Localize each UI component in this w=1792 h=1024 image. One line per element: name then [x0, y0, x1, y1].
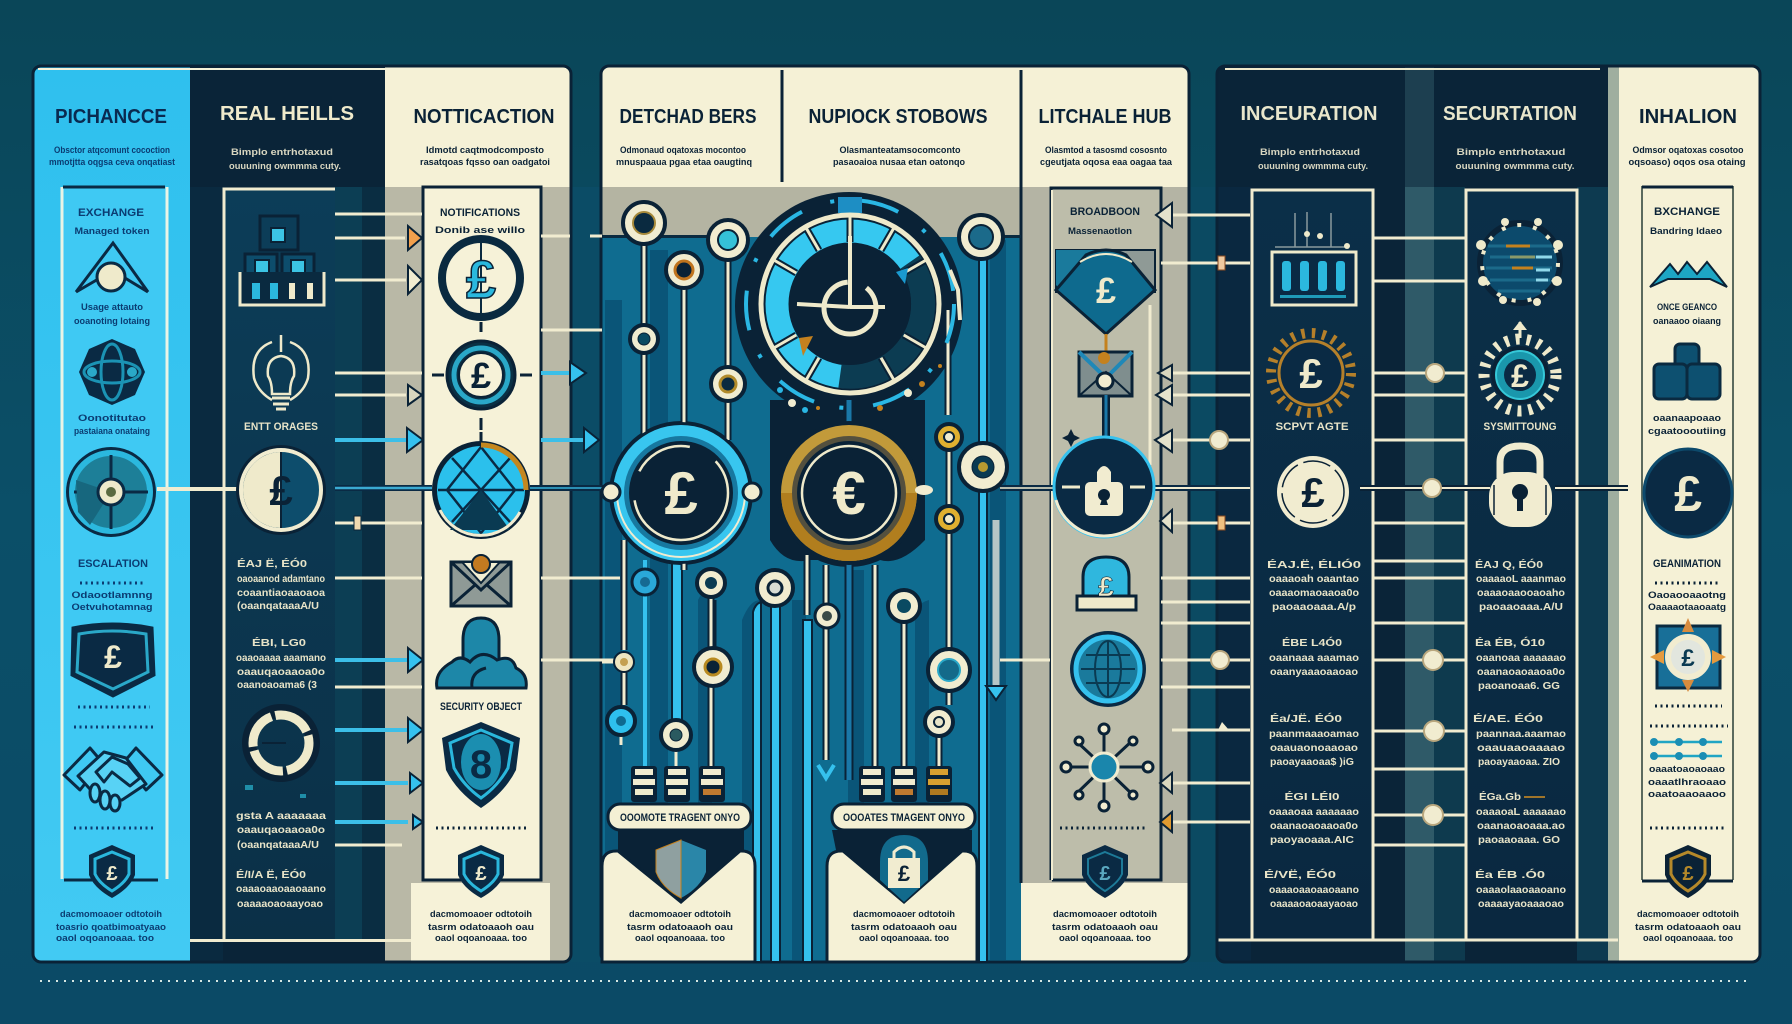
icon: shield pound [72, 624, 154, 696]
icon: pound coin col 3 [442, 239, 520, 317]
gap teal between panel A and B [571, 187, 602, 962]
col 9 labels: oaaatoaoaoaao [1649, 764, 1725, 775]
header sub-text: Odmsor oqatoxas cosotoo [1632, 145, 1744, 156]
header sub-text: ouuuning owmmma cuty. [229, 161, 341, 172]
label: security gate: SCPVT AGTE [1276, 421, 1348, 433]
card: right footer: £ [898, 861, 911, 886]
icon: envelope [451, 555, 511, 606]
text block: col 8 rows: oaaaoaL aaaaaao [1476, 806, 1566, 818]
text block: col 6 footer [1052, 909, 1158, 944]
icon: pound ring coin col 3 [432, 322, 532, 445]
text block: col 1 footer: oaol oqoanoaaa. too [56, 933, 154, 944]
column headings: INCEURATION [1240, 103, 1378, 125]
col 9 labels: GEANIMATION [1653, 558, 1721, 570]
header sub-text: ouuuning owmmma cuty. [1258, 161, 1368, 172]
header sub-text: Bimplo entrhotaxud [1260, 147, 1360, 158]
vertical connector lines [602, 237, 1060, 780]
col 6 labels: Massenaotlon [1068, 226, 1132, 237]
col 9 labels: Oaoaooaaotng [1648, 590, 1726, 601]
text: notifications label: Donib ase willo [435, 225, 525, 236]
pill: left label [608, 804, 751, 830]
icon: shield pound: £ [104, 639, 122, 675]
icon: sun gear pound [1271, 333, 1351, 413]
icon: bars panel [1272, 212, 1356, 305]
icon: lock small: £ [1098, 571, 1114, 602]
icon: pin shield pound: £ [1096, 270, 1116, 311]
header sub-text: oqsoaso) oqos osa otaing [1628, 157, 1746, 168]
text block: col 7 rows: ÉGI LÉI0 [1284, 790, 1340, 803]
text block: col 1 footer [56, 909, 166, 944]
icon: lightbulb [253, 335, 309, 409]
column headings: PICHANCCE [55, 106, 167, 128]
icon: small shield col 1: £ [106, 863, 118, 885]
icon: gear with arrow: £ [1511, 358, 1529, 394]
gap teal between panel B and C [1189, 187, 1218, 962]
icon: pound coin col 3: £ [466, 250, 496, 310]
col 9 labels: Oaaaaotaaoaatg [1648, 602, 1726, 613]
icon: sun gear pound: £ [1299, 350, 1323, 397]
text block: col 3 footer [428, 909, 534, 944]
icon: small shield col 6 [1082, 845, 1128, 898]
column headings: NOTTICACTION [414, 106, 554, 128]
node: nodes upper left [623, 202, 748, 401]
card: right footer: dacmomoaoer odtotoih [853, 909, 955, 920]
panel: left group [34, 67, 571, 962]
header sub-text: ouuuning owmmma cuty. [1456, 161, 1574, 172]
label: security object: SECURITY OBJECT [440, 701, 522, 713]
header sub-text: rasatqoas fqsso oan oadgatoi [420, 157, 550, 168]
text block: col 8 rows: ÉGa.Gb [1479, 790, 1521, 803]
header sub-text: cgeutjata oqosa eaa oagaa taa [1040, 157, 1173, 168]
connectors: col 6 to col 7 [1150, 203, 1250, 832]
icon: lock small [1077, 557, 1136, 610]
text block: col 8 rows: paoanoaa6. GG [1478, 680, 1560, 692]
icon: pound ring coin col 3: £ [471, 355, 491, 396]
card: right footer [827, 835, 977, 962]
text block: col 6 footer: oaol oqoanoaaa. too [1059, 933, 1151, 944]
text block: col 9 footer: oaol oqoanoaaa. too [1643, 933, 1733, 944]
text block: col 8 rows: oaaaolaaoaaoano [1476, 884, 1566, 896]
text block: col 8 rows: oaanaoaoaaa.ao [1477, 820, 1565, 832]
col 1 labels: ESCALATION [78, 558, 148, 570]
text block: col 8 rows: oaauaaoaaaao [1477, 742, 1565, 754]
card: right footer: oaol oqoanoaaa. too [859, 933, 949, 944]
icon: timeline dots [1650, 738, 1722, 760]
column headings: SECURTATION [1443, 103, 1577, 125]
text block: col 8 rows: paoaaoaaa.A/U [1479, 601, 1563, 613]
card: left footer: tasrm odatoaaoh oau [627, 922, 733, 933]
text block: col 7 rows: oaaaoaaoaaoaano [1269, 884, 1359, 896]
text block: col 7 rows: oaanaoaoaaoa0o [1270, 820, 1358, 832]
text block: col 2 rows: coaantiaoaaoaoa [237, 587, 325, 599]
column headings: REAL HEILLS [220, 103, 354, 125]
header sub-text: pasaoaioa nusaa etan oatonqo [833, 157, 965, 168]
decorative center stripes [605, 240, 1006, 962]
pill: right label: OOOATES TMAGENT ONYO [843, 812, 965, 824]
text block: col 7 rows: oaanyaaaoaaoao [1270, 666, 1358, 678]
text block: col 8 rows: oaaaayaoaaaoao [1478, 898, 1564, 910]
bottom dotted rule [40, 980, 1750, 982]
icon: half coin col 2 [236, 445, 326, 535]
header sub-text: Idmotd caqtmodcomposto [426, 145, 544, 156]
header sub-text: Olasmtod a tasosmd cososnto [1045, 145, 1167, 156]
text block: col 7 rows: oaaaomaoaaoa0o [1269, 587, 1359, 599]
icon: gear with arrow [1484, 321, 1556, 411]
col 9 labels: oaatoaaoaaoo [1648, 789, 1726, 800]
coin: gold [777, 421, 933, 565]
clock dial [746, 197, 960, 413]
text block: col 8 rows: paannaa.aaamao [1476, 728, 1566, 740]
icon: cream coin: £ [1301, 469, 1325, 516]
pill: left label: OOOMOTE TRAGENT ONYO [620, 812, 740, 824]
text block: col 8 rows: ÉAJ Q, ÉÓ0 [1475, 558, 1543, 571]
icon: ornament badge: £ [1681, 645, 1695, 672]
text block: col 1 footer: toasrio qoatbimoatyaao [56, 922, 166, 933]
col 1 labels: Odaootlamnng [72, 590, 153, 601]
icon: small shield col 3: £ [475, 863, 487, 885]
icon: small shield col 6: £ [1099, 863, 1111, 885]
text block: col 3 footer: dacmomoaoer odtotoih [430, 909, 532, 920]
icon: globe [1070, 631, 1146, 707]
header sub-text: Bimplo entrhotaxud [231, 147, 333, 158]
text block: col 8 rows: oaaaoaaooaoaho [1477, 587, 1565, 599]
text block: col 8 rows [1473, 558, 1566, 910]
icon: small shield col 3 [458, 845, 504, 898]
text block: col 7 rows: oaanaaa aaamao [1269, 652, 1359, 664]
text block: col 8 rows: paoaaoaaa. GO [1478, 834, 1560, 846]
text block: col 9 footer: dacmomoaoer odtotoih [1637, 909, 1739, 920]
connectors: col 7 to col 8 [1360, 238, 1628, 845]
label: entrances: ENTT ORAGES [244, 421, 318, 433]
node: nodes lower [607, 569, 970, 750]
icon: half coin col 2: £ [269, 467, 293, 514]
col 9 labels [1648, 206, 1728, 828]
text block: col 8 rows: É/AE. ÉÓ0 [1473, 712, 1543, 725]
col 1 labels: Oonotitutao [78, 413, 146, 424]
text block: col 7 rows: ÉAJ.Ë, ÉLIÓ0 [1267, 558, 1361, 571]
col 9 labels: cgaatoooutiing [1648, 426, 1726, 437]
text block: col 2 rows: É/I/A Ë, ÉÓ0 [236, 868, 306, 881]
text block: col 2 rows: (oaanqataaaA/U [237, 600, 319, 612]
card: left footer: dacmomoaoer odtotoih [629, 909, 731, 920]
text block: col 8 rows: Éa ÉB, Ó10 [1475, 636, 1545, 649]
text block: col 2 rows: oaauqaoaaoa0o [237, 666, 325, 678]
card: right footer: tasrm odatoaaoh oau [851, 922, 957, 933]
icon: tech circle [1476, 218, 1563, 306]
text block: col 8 rows: oaaaaoL aaanmao [1476, 573, 1566, 585]
col 9 labels: oanaaoo oiaang [1653, 316, 1721, 327]
dotted text row col 6 [1060, 826, 1148, 830]
text block: col 6 footer: dacmomoaoer odtotoih [1053, 909, 1157, 920]
text block: col 2 rows [236, 557, 326, 910]
coin: gold: € [832, 460, 866, 527]
text block: col 2 rows: oaanoaoama6 (3 [237, 679, 317, 691]
icon: dark pound coin [1644, 449, 1732, 537]
text block: col 7 rows: ÉBE L4Ó0 [1282, 636, 1342, 649]
text block: col 8 rows: oaanaoaoaaoa0o [1477, 666, 1565, 678]
text block: col 2 rows: oaaoaaaa aaamano [236, 652, 326, 664]
text block: col 7 rows: oaauaonoaaoao [1270, 742, 1358, 754]
header sub-text [49, 145, 1746, 172]
col 1 labels: Managed token [74, 226, 150, 237]
icon: gold shield [1665, 845, 1711, 898]
col 6 labels [1068, 206, 1140, 237]
card: left footer [602, 840, 755, 962]
text block: col 7 rows: oaaaoaa aaaaaao [1269, 806, 1359, 818]
icon: network hub [1061, 724, 1153, 811]
connector col 1 to col 2 [157, 487, 240, 491]
text block: col 1 footer: dacmomoaoer odtotoih [60, 909, 162, 920]
dotted text row col 3 [436, 826, 528, 830]
panel: center group [602, 67, 1189, 962]
text block: col 9 footer [1635, 909, 1741, 944]
icon: lock coin [1054, 437, 1154, 537]
col 9 labels: ONCE GEANCO [1657, 302, 1717, 313]
col 1 labels: EXCHANGE [78, 207, 144, 219]
text: notifications label [435, 207, 525, 236]
column headings: LITCHALE HUB [1038, 106, 1172, 128]
header sub-text: Olasmanteatamsocomconto [840, 145, 961, 156]
panel: right group [1190, 67, 1760, 962]
header sub-text: mmotjtta oqgsa ceva onqatiast [49, 157, 176, 168]
icon: octagon molecule [79, 339, 145, 405]
bundles: right [859, 766, 952, 802]
coin: blue pound [602, 422, 761, 564]
text block: col 7 rows: paoyaoaaa.AIC [1270, 834, 1354, 846]
text block: col 7 rows [1264, 558, 1361, 910]
icon: padlock [1489, 446, 1552, 527]
column headings: NUPIOCK STOBOWS [808, 106, 988, 128]
text block: col 2 rows: (oaanqataaaA/U [237, 839, 319, 851]
icon: dark pound coin: £ [1674, 466, 1702, 522]
col 1 labels: Usage attauto [81, 302, 143, 313]
col 1 labels: ooanoting lotaing [74, 316, 150, 327]
icon: handshake [64, 748, 162, 811]
icon: small shield col 1 [89, 845, 135, 898]
text block: col 7 rows: oaaaaoaoaayaoao [1270, 898, 1358, 910]
icon: stacked blocks [1654, 344, 1720, 399]
label: security row col 8: SYSMITTOUNG [1484, 421, 1556, 433]
col 1 labels [72, 207, 154, 828]
text block: col 7 rows: oaaaoah oaantao [1269, 573, 1359, 585]
icon: shield col 3 [442, 722, 520, 808]
text block: col 2 rows: ÉAJ Ë, ÉÓ0 [237, 557, 307, 570]
icon: mountains [1650, 262, 1727, 287]
connectors: col 2 to col 3 [335, 214, 432, 845]
text block: col 9 footer: tasrm odatoaaoh oau [1635, 922, 1741, 933]
icon: gold shield: £ [1682, 863, 1694, 885]
text block: col 2 rows: oaaaaoaoaayoao [237, 898, 323, 910]
header sub-text: mnuspaaua pgaa etaa oaugtinq [616, 157, 752, 168]
icon: triangle node [76, 243, 148, 292]
column headings [55, 103, 1737, 128]
header sub-text: Obsctor atqcomunt cocoction [54, 145, 170, 156]
text block: col 3 footer: tasrm odatoaaoh oau [428, 922, 534, 933]
text block: col 8 rows: oaanoaa aaaaaao [1476, 652, 1566, 664]
text block: col 7 rows: Éa/JË. ÉÓ0 [1270, 712, 1342, 725]
node: nodes right [936, 215, 1007, 532]
text block: col 7 rows: paanmaaaoamao [1269, 728, 1359, 740]
icon: envelope col 6 [1062, 352, 1132, 447]
icon: cream coin [1277, 456, 1349, 528]
text block: col 2 rows: oaauqaoaaoa0o [237, 824, 325, 836]
icon: ring gauge [245, 711, 313, 798]
icon: ornament badge [1650, 618, 1726, 692]
text block: col 6 footer: tasrm odatoaaoh oau [1052, 922, 1158, 933]
icon: faceted coin col 3 [432, 441, 530, 539]
text block: col 7 rows: É/VË, ÉÓ0 [1264, 868, 1336, 881]
text block: col 7 rows: paoayaaoaa$ )iG [1270, 756, 1354, 768]
connectors: col 3 to center [530, 236, 620, 660]
icon: pin shield pound [1056, 250, 1155, 465]
icon: wheel coin col 1 [66, 447, 156, 537]
text block: col 7 rows: paoaaoaaa.A/p [1272, 601, 1356, 613]
text block: col 8 rows: Éa ÉB .Ó0 [1475, 868, 1545, 881]
coin: blue pound: £ [664, 460, 698, 527]
column headings: DETCHAD BERS [620, 106, 756, 128]
col 1 labels: pastaiana onataing [74, 426, 150, 437]
bundles: left [631, 766, 725, 802]
text: notifications label: NOTIFICATIONS [440, 207, 520, 219]
card: left footer: oaol oqoanoaaa. too [635, 933, 725, 944]
text block: col 3 footer: oaol oqoanoaaa. too [435, 933, 527, 944]
central dark backing [609, 192, 972, 903]
pill: right label [832, 804, 975, 830]
header sub-text: Bimplo entrhotaxud [1456, 147, 1566, 158]
icon: buildings [240, 216, 324, 305]
column headings: INHALION [1639, 106, 1737, 128]
icon: cloud tower [437, 618, 526, 688]
col 9 labels: BXCHANGE [1654, 206, 1720, 218]
header sub-text: Odmonaud oqatoxas mocontoo [620, 145, 746, 156]
text block: col 2 rows: gsta A aaaaaaa [236, 810, 326, 822]
col 1 labels: Oetvuhotamnag [72, 602, 153, 613]
text block: col 2 rows: ÉBI, LG0 [252, 636, 306, 649]
col 9 labels: oaanaapoaao [1653, 413, 1721, 424]
col 6 labels: BROADBOON [1070, 206, 1140, 218]
text block: col 2 rows: oaoaanod adamtano [237, 573, 325, 585]
text block: col 2 rows: oaaaoaaoaaoaano [236, 883, 326, 895]
col 9 labels: oaaatlhraoaao [1648, 777, 1726, 788]
col 9 labels: Bandring ldaeo [1650, 226, 1722, 237]
icon: shield col 3: 8 [470, 743, 492, 787]
text block: col 8 rows: paoayaaoaa. ZIO [1478, 756, 1560, 768]
